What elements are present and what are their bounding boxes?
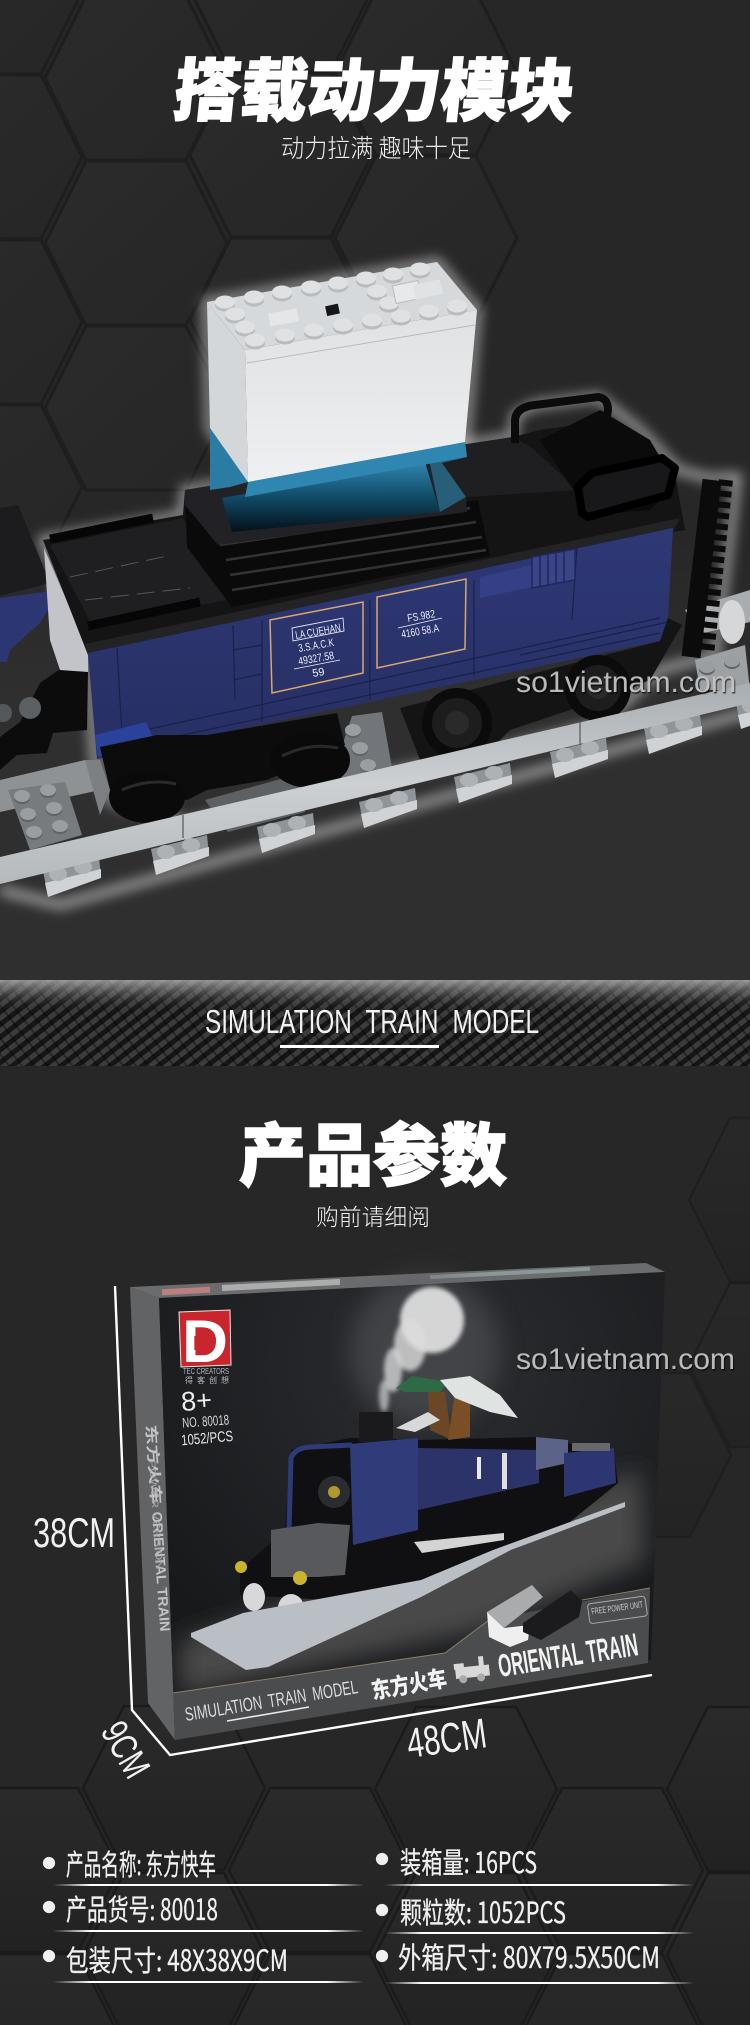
- battery top: [207, 262, 477, 350]
- tender: [564, 1448, 616, 1497]
- wheel centre: [422, 688, 492, 758]
- battery module: [207, 262, 477, 497]
- boiler: [418, 1448, 539, 1510]
- spec: piece count: 颗粒数: 1052PCS: [400, 1890, 566, 1932]
- box top lettering blocks: [162, 1267, 590, 1295]
- strip border line: [173, 1588, 650, 1693]
- spec: piece count: [376, 1890, 694, 1934]
- box top side: [130, 1263, 665, 1298]
- dimension: depth: 9CM: [92, 1714, 158, 1786]
- smoke haze: [350, 1275, 500, 1425]
- brand logo: K: [193, 1333, 208, 1355]
- box left side: [130, 1287, 175, 1740]
- wheel cover middle: [270, 732, 350, 788]
- rear cab: [536, 1437, 568, 1470]
- tank top frame: [185, 450, 467, 545]
- free power unit badge: [587, 1596, 648, 1624]
- wheel cover left: [109, 771, 185, 823]
- battery front: [245, 310, 477, 482]
- banner text: SIMULATION TRAIN MODEL: [205, 1003, 539, 1040]
- gear rack at end of car: [691, 480, 726, 657]
- black band above body: [85, 518, 680, 655]
- free power unit badge: FREE POWER UNIT: [591, 1599, 644, 1617]
- subtitle: power module: 动力拉满 趣味十足: [281, 129, 471, 165]
- roof mechanism: [540, 410, 676, 515]
- age: 8+: [180, 1385, 213, 1417]
- back track and sleepers: [0, 590, 750, 850]
- black upper body: [43, 420, 685, 655]
- title: product parameters: 产品参数: [239, 1101, 507, 1200]
- tree: [396, 1376, 518, 1440]
- product box: [130, 1263, 665, 1740]
- vent ribs: [532, 549, 575, 588]
- specs list: [43, 1840, 694, 1984]
- brand logo: TEC CREATORS: [183, 1367, 229, 1376]
- box label underline: [227, 1707, 309, 1721]
- white glow behind battery and train: [0, 262, 750, 905]
- plate frame two: FS.982: [406, 608, 436, 625]
- body panel lines: [117, 547, 668, 742]
- carbon banner: [0, 980, 750, 1066]
- ground glow: [180, 1470, 645, 1695]
- wheel right: [565, 655, 631, 721]
- brand logo: 得客创想: [185, 1375, 229, 1386]
- brand logo: D: [182, 1308, 228, 1375]
- decorated strip: [414, 1533, 504, 1553]
- spec: carton size: 外箱尺寸: 80X79.5X50CM: [398, 1935, 660, 1977]
- mini motor: [523, 1590, 582, 1640]
- deck handle bars: [50, 518, 200, 626]
- bumper blocks: [100, 713, 345, 800]
- side lettering: ORIENTAL TRAIN: [149, 1511, 173, 1632]
- lights: [235, 1561, 247, 1573]
- watermark top: so1vietnam.com: [516, 666, 736, 699]
- front rail with ties: [0, 683, 750, 897]
- box front: [159, 1272, 665, 1740]
- bright blue corner: [95, 722, 155, 757]
- plate frame two: 4160 58.A: [400, 622, 440, 641]
- battery top studs: [215, 262, 467, 350]
- title: power module: 搭载动力模块: [170, 36, 580, 135]
- side lettering: 东方火车: [141, 1424, 167, 1505]
- blue light pool on tank: [222, 462, 440, 532]
- cab block: [350, 1438, 418, 1545]
- chrome wheel: [719, 600, 745, 644]
- spec: product name: 产品名称: 东方快车: [66, 1842, 216, 1884]
- banner underline: [280, 1045, 439, 1048]
- handrail front: [578, 458, 675, 517]
- dimension: height: 38CM: [33, 1509, 115, 1556]
- spec: item number: [43, 1887, 364, 1932]
- watermark lower: so1vietnam.com: [516, 1343, 735, 1376]
- spec: carton quantity: [376, 1840, 694, 1886]
- chinese product name: 东方火车: [368, 1659, 449, 1706]
- vent panel: [480, 565, 532, 598]
- white end strip of car: [44, 548, 88, 672]
- side lettering: [141, 1424, 173, 1632]
- plate frame one: 3.S.A.C.K: [297, 637, 335, 655]
- mini battery: [487, 1585, 543, 1647]
- plate frame one: 49327.58: [297, 650, 335, 668]
- spec: carton quantity: 装箱量: 16PCS: [400, 1840, 537, 1882]
- left neighbouring carriage: [0, 505, 88, 770]
- spec: item number: 产品货号: 80018: [66, 1887, 218, 1929]
- background hexagons: upper section: [0, 0, 517, 569]
- smoke plume: [379, 1287, 464, 1412]
- tank stripes: [185, 492, 490, 607]
- box bottom strip: [173, 1588, 650, 1740]
- box bottom label: SIMULATION TRAIN MODEL: [183, 1677, 360, 1726]
- deck seams: [70, 556, 190, 600]
- train tender car: [43, 420, 685, 823]
- blue light patch on roof: [427, 442, 467, 512]
- chrome wheels: [243, 1583, 265, 1611]
- plate frame one: LA CUEHAN: [294, 622, 342, 642]
- product track: [191, 1502, 625, 1670]
- plows: [271, 1523, 350, 1577]
- front ring: [289, 1445, 352, 1530]
- blue carriage body: [88, 528, 673, 759]
- rear roof panel: [427, 437, 578, 497]
- chimney: [359, 1412, 393, 1442]
- piece count: 1052/PCS: [180, 1428, 234, 1449]
- plate frame one: 59: [311, 666, 326, 680]
- dimension lines: [115, 1286, 652, 1755]
- handrail rear: [515, 397, 608, 443]
- plate frame one: [270, 602, 363, 693]
- side lettering: POWER VERSION: [147, 1459, 165, 1570]
- plate frame two: [377, 579, 466, 668]
- locomotive: [235, 1412, 618, 1622]
- subtitle: read before buying: 购前请细阅: [316, 1198, 430, 1232]
- battery lip line: [247, 325, 475, 363]
- black frame under body: [400, 618, 682, 760]
- item number: NO. 80018: [182, 1411, 230, 1431]
- train glyph: [453, 1655, 490, 1684]
- spec: package size: 包装尺寸: 48X38X9CM: [66, 1938, 288, 1980]
- blue light beam: [210, 428, 248, 490]
- end deck roof: [50, 518, 228, 625]
- dimension: width: 48CM: [404, 1709, 489, 1767]
- background hexagons: lower section: [0, 1118, 750, 2025]
- lower flat floor of upper section: [0, 540, 750, 980]
- power module group: [0, 262, 750, 905]
- battery left side: [207, 302, 248, 482]
